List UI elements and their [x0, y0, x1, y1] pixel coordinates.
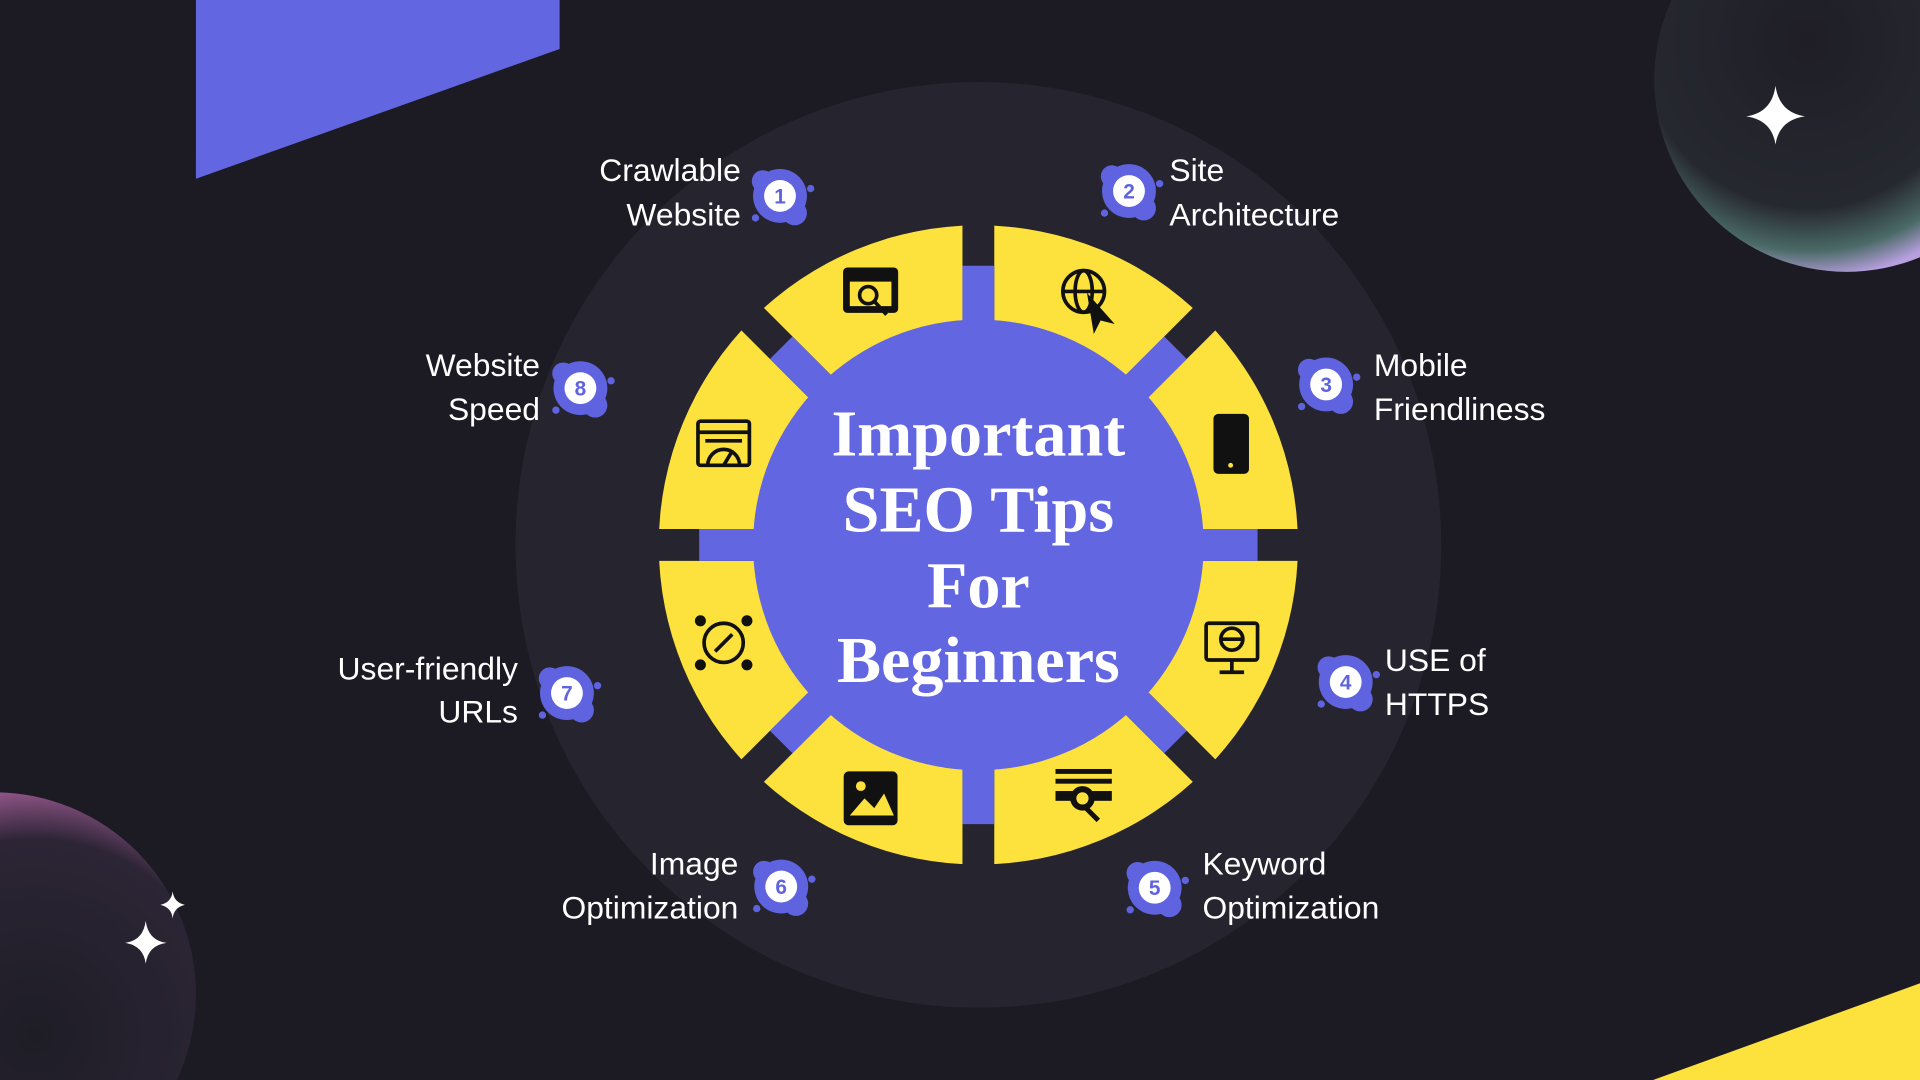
- label 2: Architecture: [1169, 196, 1339, 232]
- decorative purple shape top-left: [196, 0, 560, 179]
- icon: link: [697, 617, 751, 669]
- label 6: [561, 845, 816, 925]
- label 4: USE of: [1385, 642, 1486, 678]
- bubble top-right: [1654, 0, 1920, 272]
- title: For: [927, 549, 1030, 622]
- label 1: Website: [626, 196, 741, 232]
- label 6: Optimization: [561, 889, 738, 925]
- label 8: [426, 347, 615, 427]
- icon: monitor globe: [1206, 623, 1258, 672]
- icon: crawlable search browser: [845, 269, 896, 315]
- label 1: Crawlable: [599, 152, 741, 188]
- label 4: 4: [1340, 671, 1352, 694]
- label 3: 3: [1320, 374, 1332, 397]
- icon: mobile: [1213, 414, 1249, 474]
- title: [831, 398, 1125, 697]
- icon: globe cursor: [1063, 271, 1109, 328]
- icon: speed browser: [698, 421, 749, 465]
- diagram wheel: [516, 82, 1441, 1008]
- bubble bottom-left: [0, 792, 196, 1080]
- label 5: Keyword: [1202, 845, 1326, 881]
- icon: image: [844, 771, 898, 825]
- label 5: Optimization: [1202, 889, 1379, 925]
- label 8: Speed: [448, 391, 540, 427]
- label 2: [1101, 152, 1339, 232]
- title: Beginners: [837, 624, 1120, 697]
- icon: keyword search: [1056, 769, 1112, 822]
- label 4: [1318, 642, 1489, 722]
- title: SEO Tips: [843, 473, 1114, 546]
- label 1: 1: [774, 185, 786, 208]
- label 6: 6: [775, 876, 787, 899]
- label 3: Friendliness: [1374, 391, 1545, 427]
- label 4: HTTPS: [1385, 686, 1489, 722]
- label 1: [599, 152, 814, 232]
- decorative yellow triangle bottom-right: [1653, 983, 1920, 1080]
- label 8: 8: [575, 378, 586, 401]
- label 5: 5: [1149, 877, 1160, 900]
- label 8: Website: [426, 347, 540, 383]
- label 7: 7: [561, 682, 573, 705]
- label 7: User-friendly: [338, 651, 518, 687]
- label 3: Mobile: [1374, 347, 1468, 383]
- label 2: 2: [1123, 180, 1135, 203]
- label 2: Site: [1169, 152, 1224, 188]
- label 7: [338, 651, 601, 729]
- title: Important: [831, 398, 1125, 471]
- label 6: Image: [650, 845, 738, 881]
- label 7: URLs: [438, 693, 518, 729]
- label 5: [1127, 845, 1379, 925]
- label 3: [1298, 347, 1545, 427]
- sparkles: [125, 86, 1805, 964]
